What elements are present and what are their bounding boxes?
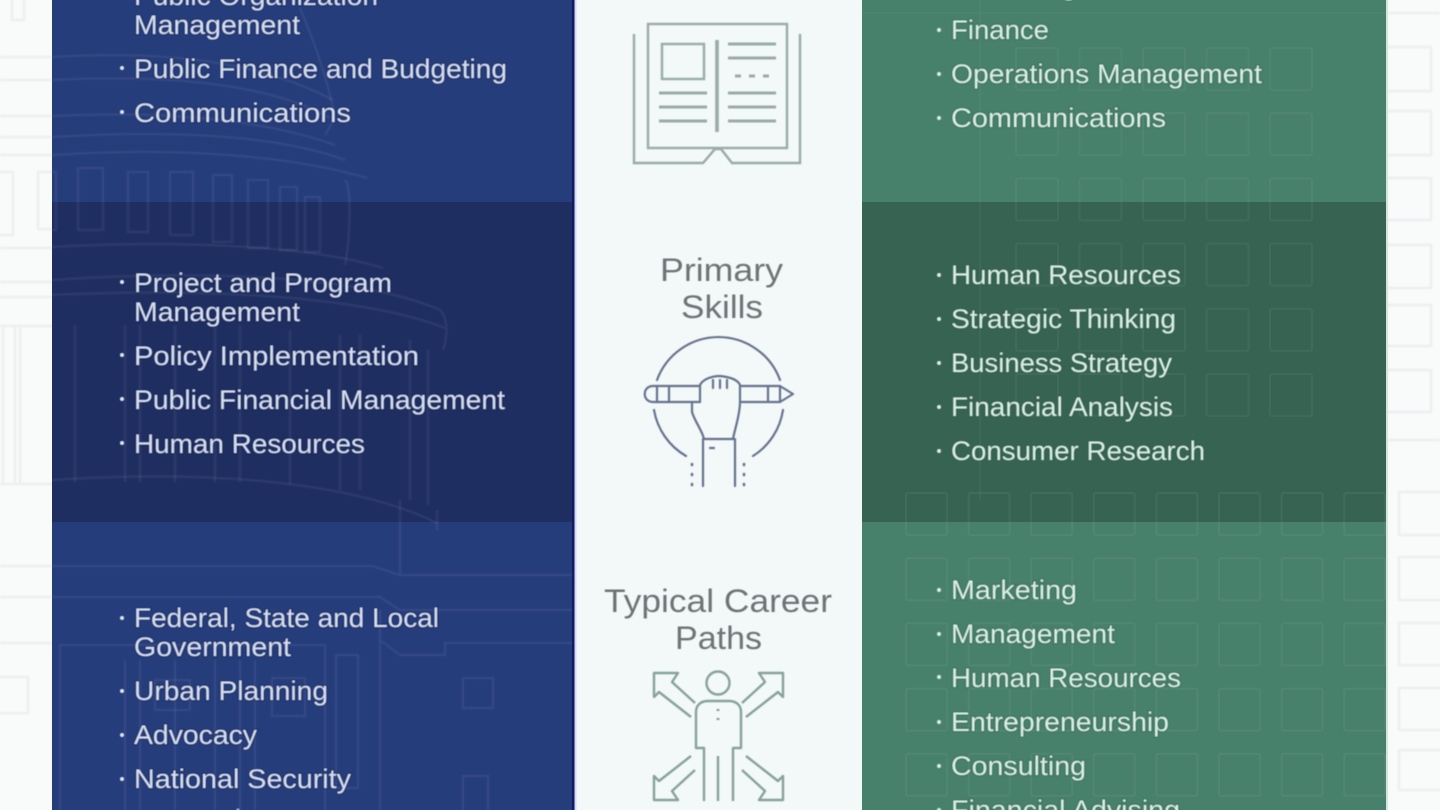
left list: top section [120, 0, 507, 128]
right list: primary skills: Consumer Research [951, 436, 1205, 466]
right list: career paths: Consulting [951, 751, 1086, 781]
right list: career paths: Entrepreneurship [951, 707, 1169, 737]
right list: primary skills [937, 260, 1205, 466]
panel: left blue column [52, 0, 576, 810]
panel: center column [576, 0, 862, 810]
panel: right green column [862, 0, 1388, 810]
office window grid lower [905, 492, 1386, 810]
right list: primary skills: Strategic Thinking [951, 304, 1176, 334]
right list: career paths [937, 575, 1181, 810]
right list: top section: Communications [951, 103, 1166, 133]
office window grid upper [1015, 47, 1315, 417]
right list: top section: Finance [951, 15, 1049, 45]
left list: primary skills: Management [134, 297, 301, 327]
heading: primary skills: Primary [660, 252, 783, 288]
right list: career paths: Marketing [951, 575, 1077, 605]
right list: primary skills: Business Strategy [951, 348, 1173, 378]
left list: top section: Public Finance and Budgeting [134, 54, 507, 84]
left list: primary skills: Human Resources [134, 429, 365, 459]
left list: top section: Communications [134, 98, 351, 128]
left list: career paths: Advocacy [134, 720, 258, 750]
icon: person with four arrows [654, 672, 783, 801]
building outline [862, 0, 1386, 500]
left list: primary skills: Public Financial Management [134, 385, 506, 415]
left list: primary skills [120, 268, 506, 459]
right list: career paths: Human Resources [951, 663, 1181, 693]
heading: typical career paths: Typical Career [604, 583, 832, 619]
left list: primary skills: Project and Program [134, 268, 392, 298]
left list: career paths: Federal, State and Local [134, 603, 439, 633]
background building pattern: right margin [1380, 13, 1440, 790]
right list: top section: Operations Management [951, 59, 1263, 89]
left list: career paths: Urban Planning [134, 676, 328, 706]
left list: top section: Management [134, 10, 301, 40]
right list: primary skills: Financial Analysis [951, 392, 1173, 422]
background building pattern: left margin [0, 0, 60, 713]
heading: primary skills [660, 252, 783, 325]
left list: career paths [120, 603, 439, 810]
left list: career paths: National Security [134, 764, 352, 794]
heading: typical career paths: Paths [675, 620, 762, 656]
capitol building line art [52, 8, 572, 810]
left list: primary skills: Policy Implementation [134, 341, 419, 371]
left list: career paths: Government [134, 632, 292, 662]
right list: top section [937, 0, 1263, 133]
heading: primary skills: Skills [681, 289, 763, 325]
heading: typical career paths [604, 583, 832, 656]
right list: primary skills: Human Resources [951, 260, 1181, 290]
icon: open book [634, 24, 800, 163]
icon: hand holding pencil [645, 337, 793, 486]
right list: career paths: Management [951, 619, 1116, 649]
